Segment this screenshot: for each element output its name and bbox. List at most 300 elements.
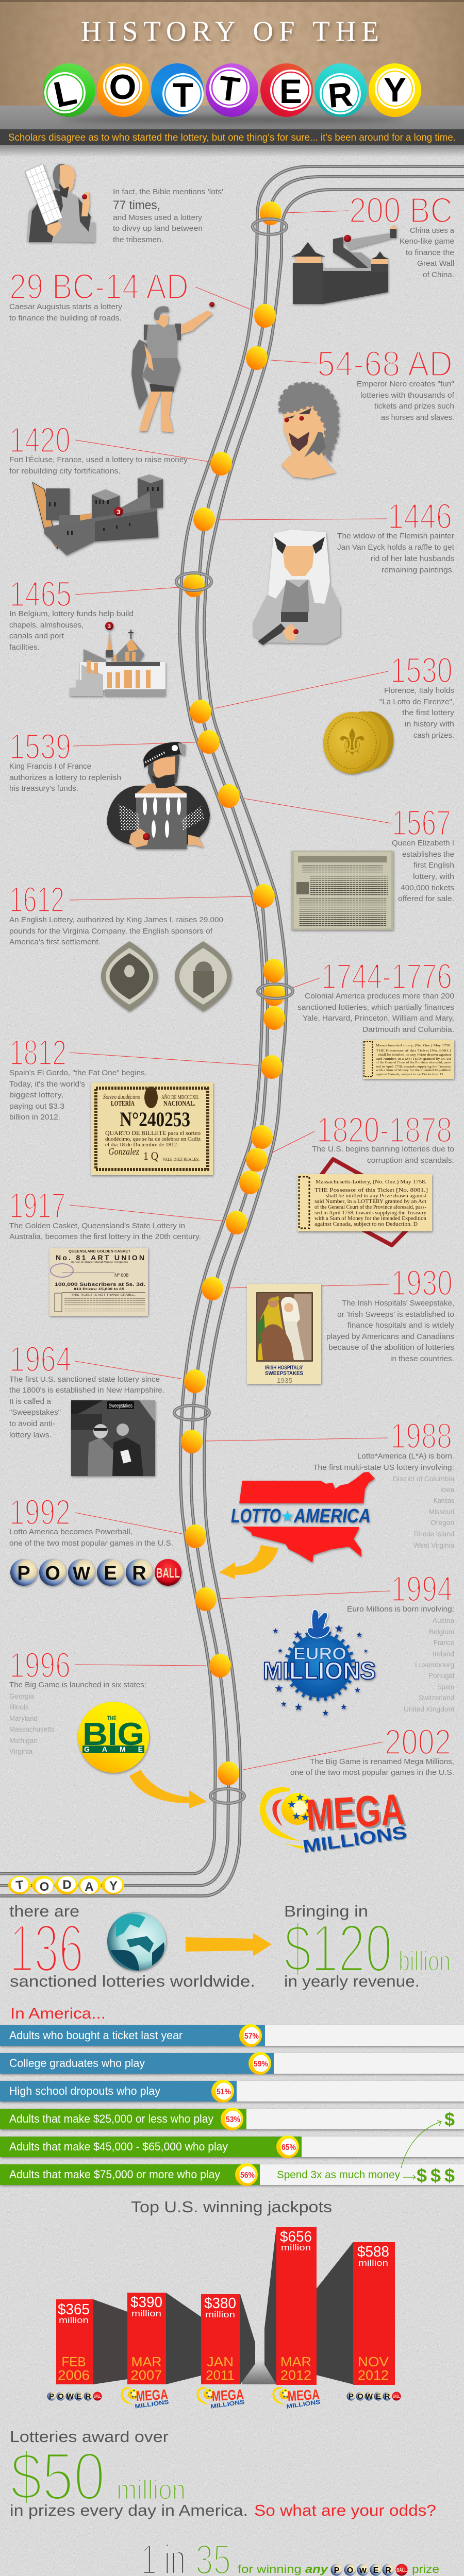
text: Today, it's the world's — [9, 1080, 85, 1089]
icon: massachusetts ticket small — [363, 1040, 454, 1079]
icon: golden casket ticket: QUEENSLAND GOLDEN CASKET — [69, 1250, 131, 1253]
text: the first lottery — [402, 709, 455, 717]
icon: euro millions logo: ★ — [280, 1700, 287, 1708]
text: offered for sale. — [398, 895, 454, 903]
icon: massachusetts ticket small: Massachusetts-Lottery, (No. One.) May 1758. — [376, 1044, 451, 1047]
text — [9, 1222, 201, 1241]
bar: make 45000 to 65000 — [0, 2136, 464, 2158]
icon: gold coins: ⚜ — [336, 722, 369, 764]
connector — [293, 978, 320, 988]
text — [9, 1528, 173, 1548]
connector — [75, 1665, 206, 1666]
panel: 1567 — [244, 799, 454, 930]
icon: el gordo ticket: LOTERÍA — [111, 1099, 135, 1108]
panel: 1996 — [9, 1645, 207, 1808]
panel: worldwide stats — [9, 1902, 451, 1990]
intro text: and Moses used a lottery — [113, 214, 203, 222]
icon: el gordo ticket: duodécimo, que se ha de celebrar en Cadiz — [105, 1136, 201, 1142]
panel: 1612 — [9, 879, 252, 1011]
callout: spend 3x: $ — [430, 2165, 441, 2186]
text: America's first settlement. — [9, 938, 101, 946]
panel: 200 BC — [286, 190, 455, 304]
stat unit: million: million — [117, 2475, 186, 2505]
bar: feb 2006: FEB — [62, 2354, 86, 2369]
list of countries — [404, 1617, 454, 1713]
text: paying out $3.3 — [9, 1103, 64, 1111]
bar: jan 2011: $380 — [204, 2295, 236, 2312]
icon: massachusetts ticket large: sed in April 1758, towards supplying the Treasury — [314, 1210, 426, 1216]
logo: mega millions small 1: MEGA — [136, 2386, 169, 2404]
text: "La Lotto de Firenze", — [379, 698, 454, 706]
text: The first multi-state US lottery involving: — [313, 1464, 454, 1472]
row: 1 in 35: BALL — [396, 2567, 407, 2573]
text: 400,000 tickets — [401, 884, 454, 892]
logo: mega millions small 2: MEGA — [211, 2386, 244, 2404]
bar: nov 2012: million — [358, 2258, 388, 2268]
text: Great Wall — [417, 260, 454, 268]
callout: spend 3x: $ — [444, 2165, 455, 2186]
text: lottery laws. — [9, 1431, 52, 1439]
bar: mar 2007: million — [131, 2309, 161, 2318]
text: of China. — [423, 271, 454, 279]
icon: mega millions logo — [260, 1785, 409, 1858]
icon: big game logo: GAME — [84, 1745, 143, 1753]
icon: euro millions logo — [263, 1609, 376, 1718]
intro text: In fact, the Bible mentions 'lots' — [113, 188, 223, 196]
text: rid of her late husbands — [371, 555, 454, 563]
text: Dartmouth and Columbia. — [362, 1026, 454, 1034]
connector — [70, 1205, 223, 1221]
icon: gold coins — [323, 711, 393, 774]
icon: lotto america logo: ★ — [280, 1508, 294, 1525]
icon: euro millions logo: EURO — [293, 1644, 346, 1663]
intro text: to divvy up land between — [113, 225, 203, 233]
year: 54-68 AD — [317, 344, 453, 384]
icon: mega millions logo: ★ — [301, 1812, 310, 1823]
icon: powerball logo: E — [104, 1563, 117, 1584]
logo: mega millions small 2: ★ — [206, 2391, 209, 2395]
panel: 1420 — [9, 420, 209, 555]
3d bar sides — [93, 2227, 353, 2384]
bar: nov 2012: NOV — [358, 2354, 389, 2369]
icon: nero — [280, 383, 338, 479]
text — [326, 1299, 455, 1363]
list of states: Virginia — [9, 1748, 32, 1755]
text: corruption and scandals. — [367, 1157, 454, 1165]
icon: big game logo: THE — [107, 1715, 117, 1722]
year: 1465 — [9, 574, 72, 614]
text: one of the two most popular games in the U.S. — [290, 1769, 454, 1777]
icon: golden casket ticket: THIS TICKET IS NOT TRANSFERABLE. — [71, 1294, 136, 1297]
logo: powerball small 2: O — [357, 2392, 363, 2401]
text: so what are your odds: So what are your odds? — [254, 2501, 436, 2519]
icon: mega millions logo: ★ — [295, 1792, 305, 1803]
subtitle bar: Scholars disagree as to who started the lottery, but one thing's for sure... it's been around for a long time. — [8, 132, 456, 143]
connector — [244, 799, 391, 823]
text: The U.S. begins banning lotteries due to — [312, 1145, 454, 1154]
icon: el gordo ticket: el dia 18 de Diciembre de 1812. — [105, 1142, 178, 1148]
icon: lotto america logo: LOTTO — [231, 1505, 281, 1527]
logo: powerball small: O — [58, 2392, 64, 2401]
text: for rebuilding city fortifications. — [9, 467, 121, 476]
list of countries: Portugal — [428, 1672, 454, 1680]
icon: euro millions logo: ★ — [293, 1629, 303, 1641]
list of states: Massachusetts — [9, 1725, 55, 1733]
logo: powerball small: BALL — [94, 2394, 101, 2399]
bar: feb 2006: 2006 — [58, 2367, 90, 2383]
bar: mar 2012: MAR — [280, 2354, 311, 2369]
icon: el gordo ticket: 1 Q — [143, 1149, 158, 1162]
icon: massachusetts ticket large: of the General Court of the Province aforesaid, pass- — [314, 1204, 426, 1210]
row: 1 in 35: prize — [412, 2563, 439, 2575]
intro text: the tribesmen. — [113, 236, 163, 244]
list of states: Rhode Island — [414, 1530, 454, 1538]
text: there are: there are — [9, 1902, 79, 1920]
bar: mar 2012: 2012 — [280, 2367, 311, 2383]
icon: powerball logo: BALL — [156, 1565, 180, 1581]
logo: mega millions small 1: MILLIONS — [135, 2399, 170, 2410]
text: Queen Elizabeth I — [392, 839, 454, 848]
list of states: District of Columbia — [393, 1475, 454, 1483]
text: facilities. — [9, 643, 40, 652]
bar: college graduates: 59% — [254, 2060, 268, 2069]
connector — [228, 1284, 389, 1288]
icon: el gordo ticket — [91, 1082, 213, 1175]
today balls: O — [40, 1880, 49, 1894]
text: The Irish Hospitals' Sweepstake, — [342, 1299, 454, 1308]
text: Australia, becomes the first lottery in the 20th century. — [9, 1233, 201, 1241]
text: canals and port — [9, 632, 64, 640]
list of countries: Belgium — [429, 1628, 454, 1636]
text: in prizes: in prizes every day in America. — [10, 2501, 248, 2519]
arrow — [186, 1933, 272, 1956]
icon: el gordo ticket: AÑO DE MDCCCXII. — [161, 1094, 199, 1100]
list of states: Michigan — [9, 1737, 38, 1744]
text: lottery, with — [413, 873, 454, 881]
icon: irish sweepstakes poster — [247, 1284, 321, 1384]
panel: 1992 — [9, 1492, 182, 1586]
icon: irish sweepstakes poster: IRISH HOSPITALS' — [265, 1365, 303, 1371]
icon: massachusetts ticket large: shall be intitled to any Prize drawn against — [326, 1193, 426, 1199]
text: lotteries award over: Lotteries award over — [10, 2428, 169, 2446]
icon: sweepstakes photo: Sweepstakes — [109, 1403, 132, 1409]
arrow — [129, 1770, 207, 1808]
icon: golden casket ticket: 100,000 Subscribers at 5s. 3d. — [55, 1282, 145, 1287]
bar: bought a ticket — [0, 2024, 464, 2047]
logo: powerball small: P — [49, 2392, 54, 2401]
panel: 1930 — [228, 1263, 455, 1384]
icon: lotto america logo: AMERICA — [293, 1505, 371, 1527]
heading: top jackpots: Top U.S. winning jackpots — [131, 2198, 332, 2216]
icon: sweepstakes photo — [71, 1400, 155, 1476]
row: 1 in 35: R — [385, 2566, 391, 2575]
text: authorizes a lottery to replenish — [9, 774, 121, 782]
icon: el gordo ticket: NACIONAL. — [163, 1100, 195, 1108]
list of states: West Virginia — [413, 1541, 454, 1549]
row: 1 in 35: W — [359, 2566, 367, 2575]
bar: bought a ticket: 57% — [244, 2032, 259, 2041]
logo: mega millions small 2: ★ — [208, 2389, 211, 2393]
icon: euro millions logo: ★ — [322, 1709, 329, 1718]
year: 1964 — [9, 1339, 72, 1379]
year: 2002 — [385, 1722, 451, 1762]
text: as horses and slaves. — [381, 414, 454, 422]
text — [313, 1452, 454, 1472]
icon: massachusetts ticket small: said Number, in a LOTTERY granted by an Act — [376, 1057, 451, 1061]
text: Fort l'Écluse, France, used a lottery to raise money — [9, 455, 188, 464]
icon: church — [70, 622, 165, 696]
logo: powerball small: R — [86, 2392, 91, 2401]
logo: mega millions small 3: ★ — [281, 2391, 285, 2395]
list of states: Missouri — [429, 1508, 454, 1516]
icon: massachusetts ticket small: sed in April 1758, towards supplying the Treasury — [376, 1065, 452, 1069]
list of states: Georgia — [9, 1692, 34, 1700]
text — [9, 455, 188, 476]
text: finance hospitals and is widely — [347, 1321, 455, 1330]
logo: mega millions small 3 — [272, 2386, 321, 2410]
panel: 1446 — [218, 496, 454, 645]
text: The Big Game is renamed Mega Millions, — [310, 1758, 454, 1766]
connector — [271, 360, 317, 363]
panel: 1964 — [9, 1339, 181, 1476]
icon: mega millions logo: ★ — [304, 1797, 310, 1806]
text: to finance the building of roads. — [9, 314, 122, 323]
icon: el gordo ticket: VALE DIEZ REALES. — [162, 1157, 200, 1162]
text — [337, 532, 454, 574]
text — [392, 839, 454, 903]
bar: jan 2011: million — [205, 2310, 235, 2319]
text: An English Lottery, authorized by King James I, raises 29,000 — [9, 916, 223, 924]
logo: mega millions small 3: MILLIONS — [286, 2399, 321, 2410]
text: Caesar Augustus starts a lottery — [9, 303, 123, 311]
panel: 1539 — [9, 726, 210, 849]
row: 1 in 35: O — [347, 2566, 353, 2575]
icon: massachusetts ticket large: with a Sum of Money for the intended Expedition — [314, 1215, 426, 1222]
bar: high school dropouts — [0, 2080, 464, 2103]
icon: massachusetts ticket small: shall be intitled to any Prize drawn against — [378, 1053, 451, 1057]
today balls: A — [85, 1880, 94, 1894]
icon: powerball logo — [10, 1559, 181, 1586]
text: sanctioned lotteries: sanctioned lotteries worldwide. — [10, 1972, 255, 1990]
year: 1612 — [9, 879, 64, 920]
logo: powerball small: W — [67, 2392, 74, 2401]
bar: mar 2012: $656 — [280, 2229, 312, 2245]
connector — [75, 587, 179, 595]
icon: massachusetts ticket large: THE Possessor of this Ticket [No. 8081.] — [314, 1187, 428, 1193]
icon: mega millions logo: MEGA — [307, 1787, 408, 1842]
text — [9, 916, 223, 946]
list of states — [393, 1475, 454, 1549]
arrow — [219, 1545, 278, 1579]
panel: prizes — [10, 2428, 436, 2519]
logo: powerball small 2: BALL — [393, 2394, 400, 2399]
text: or 'Irish Sweeps' is established to — [337, 1311, 454, 1319]
icon: powerball logo: O — [45, 1563, 60, 1584]
bar: bought a ticket: Adults who bought a ticket last year — [9, 2029, 183, 2042]
bar: mar 2012: million — [281, 2243, 311, 2252]
text — [9, 1376, 164, 1439]
year: 1539 — [9, 726, 71, 767]
bar: feb 2006 — [56, 2299, 93, 2384]
text: King Francis I of France — [9, 762, 91, 771]
list of countries: Ireland — [433, 1650, 454, 1658]
logo: mega millions small 1: ★ — [130, 2391, 133, 2395]
text — [9, 610, 134, 652]
icon: powerball logo: R — [132, 1563, 146, 1584]
icon: mega millions logo: MILLIONS — [303, 1823, 409, 1858]
text: It is called a — [9, 1398, 52, 1406]
icon: massachusetts ticket small: of the General Court of the Province aforesaid, pass- — [376, 1061, 451, 1064]
connector — [75, 440, 209, 462]
connector — [70, 896, 252, 900]
text: Colonial America produces more than 200 — [305, 992, 454, 1001]
icon: golden casket ticket: In Aid of Queensland Public Hospitals — [71, 1261, 128, 1263]
panel: 1744-1776 — [293, 956, 454, 1079]
year: 1996 — [9, 1645, 71, 1685]
row: 1 in 35 — [141, 2536, 439, 2576]
panel: america bars — [0, 2024, 464, 2186]
text — [290, 1758, 454, 1777]
icon: big game logo — [78, 1702, 149, 1773]
connector — [206, 1438, 388, 1441]
icon: euro millions logo: ★ — [294, 1702, 303, 1713]
bar: make 45000 to 65000: 65% — [281, 2143, 296, 2152]
connector — [272, 1131, 314, 1153]
year: 1917 — [9, 1185, 65, 1226]
stat: $50: $50 — [10, 2438, 105, 2514]
bar: jan 2011 — [201, 2294, 240, 2384]
text: played by Americans and Canadians — [326, 1333, 454, 1341]
icon: el gordo ticket: Gonzalez — [108, 1146, 139, 1157]
icon: massachusetts ticket large — [297, 1174, 432, 1231]
list of countries: United Kingdom — [404, 1705, 454, 1713]
list of states: Iowa — [440, 1486, 454, 1494]
text: bringing in: Bringing in — [284, 1902, 368, 1920]
text: China uses a — [410, 227, 455, 235]
text — [9, 1069, 147, 1122]
text: tickets and prizes such — [374, 402, 454, 411]
icon: lottery document — [291, 851, 393, 930]
year: 1992 — [9, 1492, 71, 1532]
lottery balls title: E — [279, 72, 302, 110]
panel: header — [0, 0, 464, 157]
panel: 1917 — [9, 1185, 223, 1316]
icon: euro millions logo: ★ — [363, 1649, 368, 1654]
text: Yale, Harvard, Princeton, William and Mary, — [303, 1014, 454, 1023]
lottery balls title: Y — [384, 71, 406, 109]
text: to finance the — [406, 249, 454, 257]
icon: massachusetts ticket small: with a Sum of Money for the intended Expedition — [376, 1069, 452, 1072]
icon: massachusetts ticket small: against Canada, subject to no Deduction. D — [376, 1073, 443, 1076]
text: Jan Van Eyck holds a raffle to get — [337, 544, 454, 552]
icon: el gordo ticket: Sorteo duodécimo — [103, 1093, 140, 1100]
text — [400, 227, 455, 279]
bar: high school dropouts: 51% — [217, 2088, 231, 2096]
text: sanctioned lotteries, which partially finances — [297, 1004, 454, 1012]
text — [357, 380, 455, 422]
text — [9, 303, 123, 323]
lottery balls title: T — [173, 76, 193, 114]
bar: make 75000 or more — [0, 2163, 464, 2186]
title: history of the: HISTORY OF THE — [81, 15, 379, 47]
text: In Belgium, lottery funds help build — [9, 610, 134, 618]
panel: 1465 — [9, 574, 179, 696]
bar: make 25000 or less: Adults that make $25,000 or less who play — [9, 2112, 213, 2125]
logo: mega millions small 1: ★ — [132, 2389, 136, 2393]
icon: massachusetts ticket large: against Canada, subject to no Deduction. D — [314, 1221, 418, 1227]
callout: spend 3x: $ — [444, 2109, 455, 2130]
text: The first U.S. sanctioned state lottery since — [9, 1376, 160, 1384]
logo: mega millions small 1 — [121, 2386, 170, 2410]
callout: spend 3x: $ — [417, 2165, 427, 2186]
panel: 1812 — [9, 1032, 258, 1175]
logo: mega millions small 3: ★ — [283, 2395, 286, 2399]
text: establishes the — [402, 851, 454, 859]
connector — [218, 519, 387, 520]
today balls: Y — [109, 1879, 118, 1893]
text — [9, 762, 121, 793]
text: billion in 2012. — [9, 1113, 60, 1122]
timeline balls — [181, 201, 285, 1785]
text: his treasury's funds. — [9, 785, 78, 793]
bar: high school dropouts: High school dropouts who play — [9, 2084, 160, 2097]
text: because of the abolition of lotteries — [328, 1344, 454, 1352]
logo: powerball small 2: P — [349, 2392, 354, 2401]
icon: golden casket ticket: Nº 608 — [114, 1273, 128, 1278]
panel: 1988 — [206, 1416, 454, 1579]
text: one of the two most popular games in the U.S. — [9, 1539, 173, 1548]
panel: 2002 — [243, 1722, 454, 1858]
lottery balls title — [43, 63, 421, 123]
connector — [286, 211, 349, 213]
text: biggest lottery, — [9, 1091, 63, 1099]
heading: in america: In America... — [10, 2005, 106, 2022]
icon: massachusetts ticket small: THE Possessor of this Ticket [No. 8081.] — [376, 1049, 451, 1053]
icon: golden casket ticket: 813 Prizes: £5,000 to £5 — [74, 1287, 125, 1291]
bar: mar 2007: MAR — [131, 2354, 162, 2369]
logo: powerball small 2: R — [385, 2392, 390, 2401]
logo: powerball small 2: W — [366, 2392, 373, 2401]
text: first English — [413, 861, 454, 870]
bar: college graduates: College graduates who play — [9, 2057, 145, 2070]
lottery balls title: T — [217, 69, 242, 109]
list of states: Kansas — [434, 1497, 454, 1504]
text: Keno-like game — [400, 238, 454, 246]
icon: euro millions logo: ★ — [277, 1647, 283, 1654]
connector — [70, 1053, 258, 1065]
stat: 136: 136 — [9, 1910, 84, 1986]
text: Lotto*America (L*A) is born. — [357, 1452, 454, 1461]
text: pounds for the Virginia Company, the English sponsors of — [9, 927, 213, 936]
list of states — [9, 1692, 55, 1755]
icon: golden casket ticket — [49, 1248, 148, 1316]
icon: mega millions logo: ★ — [287, 1799, 296, 1810]
logo: mega millions small 1: ★ — [131, 2395, 135, 2399]
bar: make 75000 or more: Adults that make $75,000 or more who play — [9, 2168, 220, 2181]
text — [379, 687, 455, 740]
callout: spend 3x: Spend 3x as much money — [277, 2169, 400, 2181]
icon: irish sweepstakes poster: SWEEPSTAKES — [265, 1370, 303, 1377]
logo: mega millions small 2: ★ — [207, 2395, 210, 2399]
list of countries: Austria — [433, 1617, 454, 1624]
icon: globe — [107, 1912, 166, 1971]
text: "Sweepstakes" — [9, 1409, 61, 1417]
connector — [214, 671, 388, 708]
panel: odds — [8, 2536, 453, 2576]
connector — [221, 1591, 390, 1599]
icon: euro millions logo: ★ — [340, 1703, 347, 1711]
logo: powerball small 2: E — [376, 2392, 381, 2401]
